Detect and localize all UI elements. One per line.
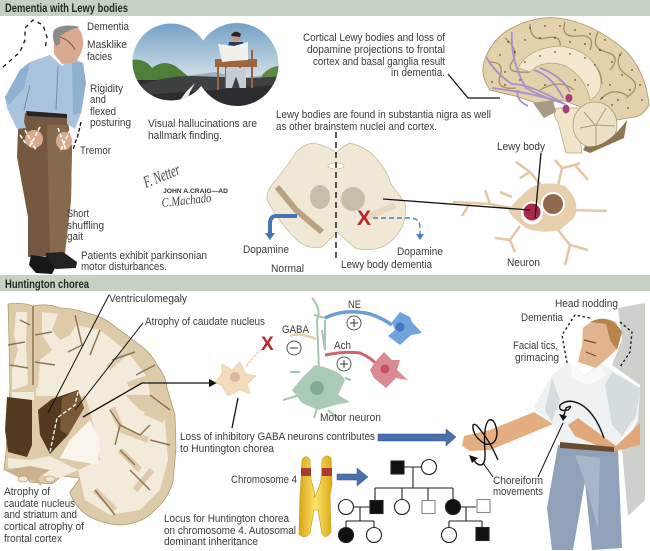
belt <box>26 111 67 118</box>
labels and signs: NE, Ach: NE <box>348 299 361 311</box>
text: locus for Huntington chorea: Locus for Huntington chorea <box>164 513 290 525</box>
labels: Huntington patient: Facial tics, <box>513 340 558 352</box>
text: locus for Huntington chorea: on chromosome 4. Autosomal <box>164 525 296 537</box>
arrow: blue to patient <box>378 429 456 446</box>
illustration: GABA neuron <box>215 335 316 396</box>
illustration: patient with parkinsonian posture <box>3 20 86 274</box>
labels: midbrain: Lewy body dementia <box>341 259 433 271</box>
cortical Lewy body dots <box>492 26 642 108</box>
cerebellum <box>573 102 617 148</box>
artist signatures: JOHN A.CRAIG—AD <box>163 188 228 195</box>
artist signatures: F. Netter <box>140 160 183 192</box>
cerebral hemisphere <box>483 18 649 122</box>
leader lines: coronal brain <box>48 295 143 413</box>
label: chromosome 4: Chromosome 4 <box>231 474 297 486</box>
text: cortical Lewy bodies <box>303 32 446 79</box>
labels: neuron <box>497 141 545 269</box>
labels: Huntington patient: Dementia <box>521 312 564 324</box>
labels: coronal brain: and striatum and <box>4 509 77 521</box>
dopamine projections <box>486 32 570 106</box>
illustration: midbrain cross-section <box>267 143 406 250</box>
arrow: normal dopamine output <box>270 216 297 234</box>
labels: neuron: Lewy body <box>497 141 545 153</box>
belt <box>560 442 614 452</box>
labels: coronal brain: cortical atrophy of <box>4 521 85 533</box>
labels: patient symptoms: flexed <box>90 106 116 118</box>
text: Lewy bodies substantia nigra <box>276 109 491 133</box>
aqueduct <box>328 163 344 169</box>
choreiform swirl: left hand <box>472 420 498 465</box>
labels: neuron: Neuron <box>507 257 540 269</box>
arrow: chromosome to pedigree <box>337 468 368 486</box>
header: Dementia with Lewy bodies: Dementia with Lewy bodies <box>5 3 128 15</box>
sulci <box>8 306 170 515</box>
shirt <box>533 362 640 447</box>
hands <box>25 130 43 148</box>
icon: red X blocked: X <box>357 207 371 230</box>
header: Huntington chorea: Huntington chorea <box>5 279 89 291</box>
text: cortical Lewy bodies: in dementia. <box>391 67 445 79</box>
pedigree chart <box>338 460 490 542</box>
text: visual hallucinations: Visual hallucinations are <box>148 118 257 130</box>
substantia nigra <box>277 187 322 232</box>
brainstem <box>554 108 584 153</box>
illustration: sagittal brain with Lewy bodies <box>483 18 649 153</box>
shoes <box>45 252 77 269</box>
text: Lewy bodies substantia nigra: as other brainstem nuclei and cortex. <box>276 121 437 133</box>
head <box>578 319 620 368</box>
labels: patient symptoms: and <box>90 94 106 106</box>
enlarged ventricles / atrophied caudate <box>5 397 32 457</box>
labels: patient symptoms <box>67 21 207 273</box>
leader lines: neuron and section <box>383 153 541 218</box>
trousers <box>17 113 72 257</box>
labels: Huntington patient <box>493 298 618 498</box>
labels: Huntington patient: Head nodding <box>555 298 618 310</box>
labels: patient symptoms: Tremor <box>80 145 111 157</box>
text: visual hallucinations: hallmark finding. <box>148 130 222 142</box>
leader lines: choreiform <box>483 423 563 477</box>
labels: coronal brain: Atrophy of <box>4 486 51 498</box>
wall shadow <box>612 303 645 516</box>
right forearm <box>568 418 640 452</box>
labels: patient symptoms: shuffling <box>67 220 104 232</box>
labels: coronal brain: frontal cortex <box>4 533 62 545</box>
labels: patient symptoms: Patients exhibit parkinsonian <box>81 250 207 262</box>
labels: coronal brain: caudate nucleus <box>4 498 75 510</box>
illustration: motor neuron <box>283 298 351 420</box>
labels: Huntington patient: Choreiform <box>493 475 543 487</box>
labels and signs: NE, Ach <box>320 299 381 424</box>
labels: midbrain <box>243 244 443 275</box>
text: loss of inhibitory GABA neurons: to Huntington chorea <box>180 443 275 455</box>
inner white band <box>518 46 601 100</box>
text: loss of inhibitory GABA neurons: Loss of inhibitory GABA neurons contributes <box>180 431 375 443</box>
text: locus for Huntington chorea <box>164 513 296 548</box>
white matter <box>12 312 28 390</box>
Lewy bodies in nuclei <box>566 94 572 102</box>
labels: midbrain: Dopamine <box>243 244 289 256</box>
dashed outline around head <box>562 315 632 367</box>
illustration: chromosome 4 <box>299 456 332 537</box>
pale striatum area <box>60 420 100 465</box>
illustration: patient with Huntington chorea <box>462 303 645 550</box>
text: locus for Huntington chorea: dominant inheritance <box>164 536 258 548</box>
lower midline structures <box>4 466 50 486</box>
labels: Huntington patient: movements <box>493 486 543 498</box>
labels: patient symptoms: motor disturbances. <box>81 261 167 273</box>
labels: coronal brain <box>4 293 265 545</box>
artist signatures <box>140 160 228 210</box>
labels: coronal brain: Ventriculomegaly <box>109 293 187 305</box>
text: loss of inhibitory GABA neurons <box>180 431 375 455</box>
text: cortical Lewy bodies: dopamine projections to frontal <box>307 44 445 56</box>
illustration: visual hallucination binocular scene <box>132 23 278 106</box>
head <box>54 26 83 64</box>
arrow: section to GABA neuron <box>83 379 217 417</box>
tremor dashes <box>20 127 70 152</box>
labels: patient symptoms: Short <box>67 208 89 220</box>
labels: coronal brain: Atrophy of caudate nucleus <box>145 316 265 328</box>
choreiform swirl: right arm <box>560 401 604 438</box>
text: visual hallucinations <box>148 118 257 142</box>
shirt <box>5 55 86 129</box>
labels: Huntington patient: grimacing <box>515 352 559 364</box>
labels: patient symptoms: Masklike <box>87 39 127 51</box>
text: cortical Lewy bodies: cortex and basal ganglia result <box>313 56 445 68</box>
labels: patient symptoms: Rigidity <box>90 83 123 95</box>
leader line: GABA neuron <box>232 398 238 428</box>
leader line to brain <box>448 74 500 98</box>
dashed atrophy boundary <box>50 392 78 452</box>
left arm <box>462 412 553 451</box>
labels and signs: GABA: GABA <box>282 324 310 336</box>
labels and signs: NE, Ach: Motor neuron <box>320 412 381 424</box>
illustration: coronal brain section <box>4 303 176 525</box>
header: Huntington chorea <box>0 275 650 291</box>
labels: patient symptoms: facies <box>87 51 112 63</box>
labels: patient symptoms: Dementia <box>87 21 130 33</box>
header: Dementia with Lewy bodies <box>0 0 650 16</box>
labels: midbrain: Normal <box>271 263 304 275</box>
labels: patient symptoms: posturing <box>90 117 131 129</box>
labels: patient symptoms: gait <box>67 231 83 243</box>
text: Lewy bodies substantia nigra: Lewy bodies are found in substantia nigra as well <box>276 109 491 121</box>
illustration: NE neuron <box>325 312 422 345</box>
red nuclei <box>310 185 330 209</box>
artist signatures: C.Machado <box>161 190 212 210</box>
midline dashed divider <box>335 132 337 262</box>
gyri <box>490 22 636 100</box>
labels and signs: GABA <box>282 324 310 355</box>
arrow: reduced dopamine dashed <box>373 218 424 240</box>
labels and signs: NE, Ach: Ach <box>334 340 351 352</box>
seated man on chair <box>216 50 256 90</box>
text: cortical Lewy bodies: Cortical Lewy bodies and loss of <box>303 32 446 44</box>
illustration: neuron with Lewy body <box>453 160 607 265</box>
illustration: Ach neuron <box>325 352 408 388</box>
dashed thought outline <box>3 20 47 67</box>
labels: midbrain: Dopamine <box>397 246 443 258</box>
icon: red X on GABA: X <box>261 334 274 355</box>
cortical folds <box>95 350 164 510</box>
trousers <box>547 445 622 550</box>
